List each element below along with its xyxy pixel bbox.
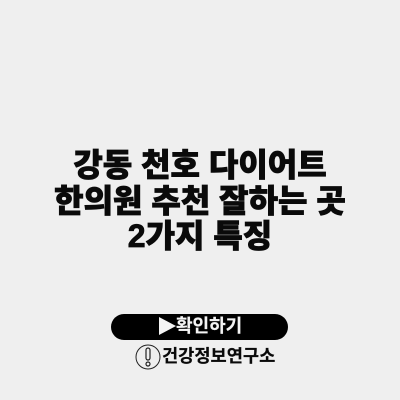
button label: 확인하기: [176, 316, 242, 336]
brand name: 건강정보연구소: [162, 346, 275, 366]
button: 확인하기: [111, 314, 288, 340]
icon: play triangle: [159, 317, 176, 335]
title: 한의원 추천 잘하는 곳: [54, 183, 346, 219]
title: [54, 147, 346, 254]
title: 2가지 특징: [128, 218, 272, 254]
brand logo: [136, 344, 275, 370]
icon: exclamation circle: [136, 344, 160, 370]
title: 강동 천호 다이어트: [73, 147, 327, 183]
